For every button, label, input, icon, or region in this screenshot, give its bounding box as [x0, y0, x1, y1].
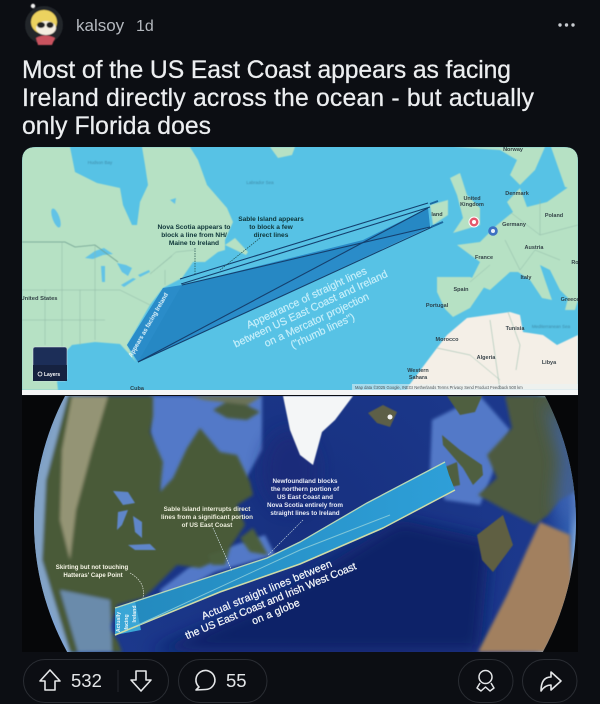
label: Sable Island globe note: Sable Island interrupts direct — [164, 506, 251, 513]
map desert Africa — [407, 312, 578, 390]
arrow: Newfoundland pointer — [268, 520, 303, 555]
map country labels: Ro — [571, 260, 579, 266]
label: Hatteras note: Hatteras' Cape Point — [63, 572, 123, 579]
map sea labels: Mediterranean Sea — [532, 324, 571, 329]
map sea labels: Hudson Bay — [88, 160, 113, 165]
comment count: 55 — [226, 670, 247, 691]
globe sphere — [34, 396, 576, 652]
map country labels: United States — [20, 296, 58, 302]
map sea labels — [88, 160, 571, 329]
markers: UK and Belgium pins — [468, 216, 498, 236]
label: actually facing Ireland: Ireland — [132, 605, 138, 623]
icon: comment bubble — [196, 671, 215, 690]
label: Mercator explanation: ("rhumb lines") — [289, 311, 357, 351]
label: Hatteras note — [56, 564, 128, 579]
panel: Mercator map — [20, 147, 579, 395]
arrow: Sable Island pointer — [220, 238, 260, 270]
map lakes — [49, 198, 176, 287]
map country labels: United — [463, 196, 481, 202]
map country labels: Algeria — [477, 355, 496, 361]
label: Newfoundland note: straight lines to Ireland — [270, 510, 340, 517]
label: actually facing Ireland: Actually — [116, 612, 122, 632]
icon: upvote arrow — [40, 670, 60, 690]
label: Sable Island globe note: lines from a significant portion — [161, 514, 253, 521]
label: actually facing Ireland: facing — [124, 614, 130, 630]
label: Hatteras note: Skirting but not touching — [56, 564, 128, 571]
layers button — [33, 347, 67, 381]
label: globe explanation: the US East Coast and Irish West Coast — [184, 560, 358, 642]
map country labels: Morocco — [436, 337, 459, 343]
map country labels: Austria — [525, 245, 544, 251]
Labrador Sea dark water — [254, 437, 309, 492]
label: appears as facing Ireland: Appears as facing Ireland — [128, 292, 170, 359]
icon: more menu — [558, 23, 575, 27]
Africa desert — [478, 522, 572, 652]
label: Nova Scotia: Maine to Ireland — [169, 240, 219, 247]
icon: share arrow — [541, 672, 561, 691]
map country labels: Norway — [503, 147, 524, 153]
post title: only Florida does — [22, 113, 211, 140]
label: Sable Island: to block a few — [249, 224, 294, 231]
map country labels: Spain — [454, 287, 469, 293]
map country labels: Libya — [542, 360, 557, 366]
arrow: Nova Scotia pointer — [194, 248, 196, 274]
label: Newfoundland note: Newfoundland blocks — [272, 478, 338, 485]
label: Nova Scotia: block a line from NH/ — [161, 232, 227, 239]
map borders — [22, 200, 578, 390]
layers button: Layers — [44, 372, 60, 378]
map country labels: Italy — [520, 275, 532, 281]
vote pill — [24, 660, 168, 702]
map sea labels: Labrador Sea — [246, 180, 274, 185]
label: Newfoundland note: Nova Scotia entirely from — [267, 502, 343, 509]
label: Newfoundland note — [267, 478, 343, 517]
label: Newfoundland note: US East Coast and — [277, 494, 333, 501]
username and age: kalsoy — [76, 16, 124, 35]
map land masses — [22, 147, 578, 390]
icon: downvote arrow — [131, 671, 151, 691]
label: Mercator explanation: between US East Coast and Ireland — [232, 268, 390, 350]
Iceland — [368, 405, 397, 427]
label: Sable Island: Sable Island appears — [238, 216, 304, 223]
map country labels: Western — [407, 368, 429, 374]
white separator strip — [22, 390, 578, 395]
shallow shelf waters — [150, 396, 510, 600]
arrow: Sable Island note pointer — [213, 528, 232, 571]
Greenland — [283, 396, 353, 465]
map country labels: Cuba — [130, 386, 145, 392]
post title — [22, 57, 535, 140]
label: globe explanation: on a globe — [250, 597, 302, 628]
label: Sable Island: direct lines — [254, 232, 289, 239]
icon: user avatar — [25, 4, 63, 45]
label: Sable Island globe note: of US East Coast — [182, 522, 233, 529]
panel: globe view — [22, 396, 585, 652]
award pill — [458, 660, 513, 702]
username and age: 1d — [136, 18, 154, 35]
label: Sable Island globe note — [161, 506, 253, 529]
label: globe explanation: Actual straight lines between — [200, 558, 334, 623]
action bar — [24, 660, 577, 702]
North America — [30, 396, 268, 652]
map country labels: Sahara — [409, 375, 428, 381]
Great Lakes — [113, 491, 156, 550]
label: Sable Island — [238, 216, 304, 237]
map country labels: France — [475, 255, 493, 261]
label: Newfoundland note: the northern portion of — [271, 486, 340, 493]
vote count: 532 — [71, 670, 102, 691]
Europe haze near limb — [540, 402, 576, 531]
label: Nova Scotia — [158, 224, 230, 245]
map country labels: Greece — [561, 297, 579, 303]
rhumb-line wedge — [127, 201, 443, 362]
post title: Ireland directly across the ocean - but actually — [22, 85, 535, 112]
deep ocean basin — [150, 520, 490, 652]
map country labels: Tunisia — [506, 326, 525, 332]
map attribution: Map data ©2025 Google, INEGI Netherlands Terms Privacy Send Product Feedback 500 km — [355, 385, 523, 390]
label: Mercator explanation: Appearance of straight lines — [245, 265, 369, 331]
map country labels: land — [431, 212, 443, 218]
map attribution — [352, 384, 578, 390]
icon: award ribbon — [477, 670, 494, 691]
share pill — [522, 660, 577, 702]
map country labels — [20, 147, 579, 392]
Iberia — [477, 515, 513, 572]
comments pill — [178, 660, 267, 702]
post title: Most of the US East Coast appears as facing — [22, 57, 511, 84]
straight-line band — [115, 462, 455, 635]
map country labels: Portugal — [426, 303, 449, 309]
label: Mercator explanation: on a Mercator projection — [262, 291, 371, 350]
label: actually facing Ireland — [116, 605, 138, 632]
label: Nova Scotia: Nova Scotia appears to — [158, 224, 230, 231]
map country labels: Kingdom — [460, 202, 484, 208]
map country labels: Denmark — [505, 191, 530, 197]
arrow: Hatteras pointer — [130, 573, 143, 598]
map country labels: Poland — [545, 213, 563, 219]
map country labels: Germany — [502, 222, 527, 228]
Europe and British Isles — [442, 396, 483, 488]
post header — [25, 4, 575, 45]
